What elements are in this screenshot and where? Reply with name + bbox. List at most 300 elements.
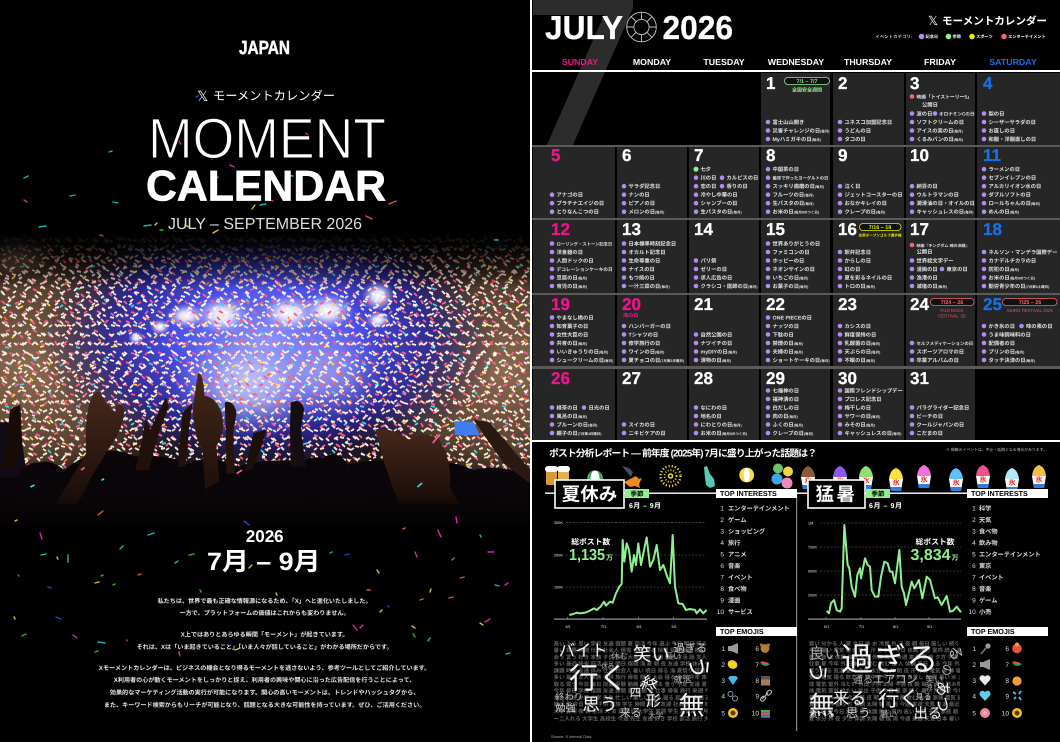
- day 9: おなかキレイの日: [844, 200, 887, 207]
- total posts: 万: [606, 554, 613, 562]
- report heading: ポスト分析レポート — 前年度 (2025年) 7月に盛り上がった話題は？: [549, 448, 817, 460]
- season tag: 季節: [630, 490, 644, 498]
- brand: X Moment Calendar: モーメントカレンダー: [213, 89, 335, 103]
- top emojis: 2: [721, 662, 725, 669]
- day 9: [833, 146, 904, 218]
- word cloud: 多い 最近 帰省 部活 今日 明日 宿題 海 夏 朝 夜 友達 学校 休み やばい 勉強 就活 時間: [554, 661, 758, 667]
- day 5: アナゴの日: [556, 192, 583, 199]
- day 20: ハンバーガーの日: [628, 323, 671, 330]
- day 30: みその日(毎月): [844, 422, 875, 428]
- day 4: 4: [983, 74, 993, 93]
- day 25: うま味調味料の日: [988, 332, 1031, 338]
- day 22: 夫婦の日(毎月): [772, 348, 803, 356]
- word cloud: バイト: [559, 642, 607, 660]
- day 30: プロレス記念日: [844, 396, 882, 403]
- day 7: [689, 146, 759, 218]
- day 21: 漬物の日(毎月): [700, 357, 731, 364]
- line chart: 6/1: [824, 625, 829, 629]
- line chart: 1M: [808, 521, 813, 525]
- day 7: 香りの日: [726, 183, 748, 190]
- day 25: プリンの日(毎月): [988, 348, 1024, 356]
- top interests: 4: [720, 540, 724, 547]
- legend: event categories: 季節: [952, 34, 961, 39]
- heat icons row: shaved ice cups: [801, 465, 1046, 491]
- line chart: 200K: [554, 553, 563, 557]
- word cloud: 出る: [914, 705, 942, 721]
- icon: goldfish: [622, 466, 642, 488]
- top interests: 天気: [979, 516, 991, 524]
- day 7: 七夕: [700, 166, 711, 173]
- season tag: [625, 489, 649, 498]
- day 30: キャッシュレスの日(毎月): [844, 430, 901, 437]
- line chart: 500K: [808, 569, 817, 573]
- panel: cover background: [0, 0, 530, 742]
- day 25: [977, 295, 1060, 366]
- day 19: 女性大臣の日: [556, 332, 588, 338]
- icon: hot face: [1012, 642, 1022, 653]
- line chart: 300K: [554, 521, 563, 525]
- event pill: Fuji Rock: [930, 298, 974, 318]
- heat icons row: shaved ice cups: 氷: [920, 476, 928, 484]
- day 15: ネオンサインの日: [772, 266, 815, 273]
- day 15: ホッピーの日: [772, 258, 804, 264]
- day 11: ラーメンの日: [988, 166, 1020, 173]
- day 7: 冷やし中華の日: [700, 192, 738, 199]
- day 23: 天ぷらの日(毎月): [844, 348, 880, 356]
- day 22: ONE PIECEの日: [772, 314, 812, 322]
- day 17: 減塩の日(毎月): [916, 283, 947, 290]
- word cloud: 毎日 汗 外 今年 今週 昼 夜 朝 風 雨 冷房 飲む 水 夏 家族 電気 寝る 室内 太陽 高い: [809, 695, 1005, 701]
- day 31: 31: [910, 369, 929, 388]
- word cloud: 夏 水分 外 夜 夕方 体調 太陽 朝 風 雨 今週 来週 天気 日本 暑い 続く 最近 毎日 今年: [809, 716, 1009, 722]
- scattered confetti: [14, 96, 510, 656]
- day 9: ジェットコースターの日: [844, 192, 903, 199]
- line chart: 7/1: [859, 625, 864, 629]
- day 16: 駅弁記念日: [844, 249, 871, 256]
- day 25: 味の素の日: [1026, 323, 1052, 330]
- gap: [530, 0, 532, 742]
- day 7: 恋の日: [700, 183, 716, 190]
- event pill: national safety week: [784, 78, 830, 94]
- brand: X Moment Calendar: 𝕏: [928, 13, 938, 28]
- day 14: クラシコ・医師の日(毎月): [700, 283, 757, 290]
- day 10: 納豆の日: [916, 183, 938, 190]
- icon: watermelon: [760, 661, 770, 666]
- day 12: 12: [551, 220, 570, 239]
- icon: links: [728, 692, 738, 701]
- day 22: ナッツの日: [772, 323, 799, 330]
- day 16: トロの日(毎月): [844, 283, 875, 290]
- word cloud: 思う: [846, 706, 870, 720]
- word cloud: 課題 時間 友達 休み 仕事 社会人 暑い 明日 帰る 海 夏祭り 読書 映画 観る 予定 旅行 夜: [554, 668, 762, 674]
- day 24: セルフメディケーションの日: [916, 341, 973, 346]
- top emojis: 7: [1005, 662, 1009, 669]
- day 11: 11: [983, 146, 1001, 165]
- intro text: [99, 597, 430, 709]
- day 14: [689, 220, 759, 293]
- word cloud: う: [806, 662, 829, 683]
- day 20: [617, 295, 687, 366]
- day 10: 潤滑油の日・オイルの日: [916, 200, 975, 207]
- word cloud: 食べる: [809, 709, 835, 719]
- day 10: ウルトラマンの日: [916, 192, 959, 199]
- day 29: ふくの日(毎月): [772, 422, 803, 428]
- day 1: 富士山山開き: [772, 119, 804, 126]
- day 27: スイカの日: [628, 422, 655, 428]
- day 27: [617, 369, 687, 440]
- icon: gem: [728, 676, 738, 685]
- word cloud: あつ: [934, 681, 951, 712]
- word cloud: 取る 買う 今日 毎日 授業 受験 動画 読む 観る 食う 予定 友達 夏休 大変 暑い 通る 今年: [554, 681, 762, 687]
- icon: yellow ball: [739, 468, 754, 482]
- top emojis: 10: [752, 710, 759, 718]
- panel: cover: [0, 40, 530, 708]
- day 5: プラチナエイジの日: [556, 200, 604, 207]
- month heading: JULY: [545, 9, 623, 46]
- day 11: めんの日(毎月): [988, 209, 1019, 216]
- day 26: 風呂の日(毎月): [556, 413, 587, 420]
- day 21: ナツイチの日: [700, 340, 732, 347]
- top interests: 10: [968, 609, 976, 616]
- day 13: [617, 220, 687, 293]
- icon: flower: [980, 708, 990, 718]
- word cloud: 過ぎる: [841, 642, 938, 678]
- top interests: 東京: [979, 562, 991, 570]
- day 5: とりなんこつの日: [556, 209, 599, 216]
- day 2: うどんの日: [844, 128, 871, 134]
- logo: JAPAN: JAPAN: [239, 38, 290, 59]
- day 16: [833, 220, 904, 293]
- day 22: 下駄の日: [772, 332, 794, 338]
- top emojis: 8: [1005, 678, 1009, 685]
- word cloud: 来る: [833, 689, 866, 708]
- day 5: [533, 146, 615, 218]
- word cloud: 思う: [582, 695, 618, 715]
- day 21: 21: [694, 295, 713, 314]
- day 22: ショートケーキの日(毎月): [772, 357, 830, 364]
- event pill: Muro Festival: MURO FESTIVAL 2026: [1007, 308, 1053, 313]
- day 25: タッチ決済の日(毎月): [988, 357, 1035, 364]
- weekday header: WEDNESDAY: [768, 57, 824, 67]
- day 19: いいきゅうりの日(毎月): [556, 348, 608, 356]
- day 9: 9: [838, 146, 847, 165]
- top interests: 7: [720, 574, 724, 582]
- day 12: ローリング・ストーン記念日: [556, 242, 612, 246]
- vertical divider: [796, 493, 797, 731]
- day 3: オロナミンCの日: [939, 112, 974, 116]
- day 17: 世界絵文字デー: [916, 258, 954, 264]
- day 17: 17: [910, 220, 929, 239]
- day 16: 夏を彩るネイルの日: [844, 274, 892, 282]
- legend: event categories: [876, 34, 1046, 39]
- day 12: 洋食器の日: [556, 249, 583, 256]
- day 25: 25: [983, 295, 1002, 314]
- day 14: パリ祭: [700, 258, 717, 264]
- day 14: 求人広告の日: [700, 274, 732, 282]
- day 25: 配偶者の日: [988, 340, 1015, 347]
- total posts: 3,834: [910, 547, 951, 564]
- day 13: オカルト記念日: [628, 249, 666, 256]
- intro text: 私たちは、世界で最も正確な情報源になるため、「X」へと進化いたしました。: [158, 597, 372, 605]
- day 3: くるみパンの日(毎月): [916, 136, 963, 143]
- panel: post analysis report: [532, 440, 1060, 739]
- event pill: The Open golf: 7/16 – 19: [869, 225, 891, 231]
- icon: beach ball: [588, 470, 602, 486]
- heat icons row: shaved ice cups: 氷: [1036, 476, 1042, 484]
- top interests: TOP INTERESTS: [720, 489, 777, 498]
- source: Source: X Internal Data: [551, 734, 592, 739]
- day 8: 菌床で作ったヨーグルトの日: [772, 176, 828, 181]
- top interests: 2: [720, 517, 724, 524]
- word cloud: 飲む 夜 人 体調 毎日 入る 外出 天気 今週 来週 風 雨 夕方 子供 室外 冷房 水 日差し: [809, 654, 1007, 660]
- word cloud: 暑い: [880, 709, 897, 719]
- word cloud: 会う 言う 好き 家族 子供 旅行 大会 先生 今週 来週 生活 話 友人 人 毎日 楽しみ 一緒 今: [554, 654, 763, 660]
- day 13: 一汁三菜の日(毎月): [628, 283, 670, 290]
- word cloud: 行く: [569, 662, 628, 695]
- day 27: 27: [622, 369, 641, 388]
- day 23: [833, 295, 904, 366]
- day 16: からしの日: [844, 258, 871, 264]
- day 2: 2: [838, 74, 847, 93]
- day 28: お米の日(毎月8のつく日): [700, 430, 747, 437]
- top interests: 1: [720, 506, 724, 512]
- day 23: 23: [838, 295, 857, 314]
- day 18: [977, 220, 1060, 293]
- day 2: [833, 73, 904, 145]
- top interests: 3: [972, 528, 976, 536]
- top interests: 科学: [979, 504, 991, 512]
- word cloud: 笑い: [925, 674, 943, 684]
- day 12: デコレーションケーキの日: [556, 266, 613, 272]
- day 13: 日本標準時刻記念日: [628, 240, 676, 248]
- day 9: 泣く日: [844, 183, 860, 190]
- day 22: 22: [766, 295, 785, 314]
- word cloud: 通る: [853, 674, 873, 686]
- column: summer vacation: [554, 480, 797, 722]
- word cloud: 気温 電気 寝る 飲む 汗 熱中症 今日 夕方 日差し 外 夏 暑い 水 太陽 高い 子供 家族: [809, 674, 1006, 680]
- top interests: 7: [972, 574, 976, 582]
- top emojis: [716, 627, 797, 718]
- top interests: 10: [717, 609, 724, 616]
- day 20: 修学旅行の日: [628, 340, 660, 347]
- day 26: [533, 369, 615, 440]
- weekday header: MONDAY: [633, 57, 671, 67]
- top emojis: 8: [755, 678, 759, 685]
- topic label: 猛暑: [815, 484, 858, 504]
- word cloud: 大学: [648, 711, 663, 720]
- legend: event categories: エンターテイメント: [1008, 34, 1046, 39]
- day 9: クレープの日(毎月): [844, 209, 885, 216]
- day 4: 和服・洋服直しの日: [988, 136, 1036, 143]
- heat icons row: shaved ice cups: 氷: [892, 479, 900, 487]
- day 29: [761, 369, 830, 440]
- day 4: [977, 73, 1060, 145]
- icon: microphone: [981, 643, 991, 654]
- word cloud: 無: [679, 692, 704, 720]
- day 1: [761, 73, 830, 145]
- weekday header: SATURDAY: [989, 57, 1037, 67]
- event pill: national safety week: 7/1 – 7/7: [797, 79, 817, 85]
- day 3: 映画「トイストーリー5」: [916, 94, 972, 100]
- brand: X Moment Calendar: モーメントカレンダー: [942, 14, 1047, 28]
- line chart: 9/1: [927, 625, 932, 629]
- line chart: 6/1: [566, 625, 571, 629]
- day 29: 福神漬の日: [772, 396, 799, 403]
- day 6: [617, 146, 687, 218]
- day 30: 国際フレンドシップデー: [844, 388, 903, 394]
- top interests: 食べ物: [728, 585, 747, 593]
- heat icons row: shaved ice cups: 氷: [804, 477, 812, 485]
- intro text: 一方で、プラットフォームの価値はこれからも変わりません。: [180, 609, 350, 617]
- total posts: 万: [952, 554, 958, 562]
- day 12: 豆腐の日(毎月): [556, 274, 587, 282]
- top interests: 8: [720, 586, 724, 593]
- word cloud: 涼しい: [925, 683, 948, 692]
- word cloud: 仕事 夏 今年 外 日本 体 飲む 飲む 夜 人 体調 毎日 入る 今年 外 夏 暑い 気温 高い: [809, 661, 1004, 667]
- word cloud: 今日 暑い 電気 寝る 飲む 汗 熱中症 今日 体調 水分 室内 続く 高い 冷たい 最近 毎年: [809, 647, 1010, 653]
- day 8: お米の日(毎月8のつく日): [772, 209, 819, 216]
- top interests: 漫画: [728, 596, 740, 604]
- top interests: 4: [972, 540, 976, 547]
- day 20: Tシャツの日: [628, 332, 658, 338]
- word cloud: 勉強: [555, 703, 576, 714]
- line chart: 750K: [808, 545, 817, 549]
- top interests: 9: [972, 598, 976, 604]
- word cloud: 就活: [674, 674, 691, 684]
- weekday header: FRIDAY: [924, 57, 956, 67]
- word cloud: 笑い: [633, 644, 670, 665]
- icon: sunflower: [1012, 708, 1022, 718]
- line chart: 7/1: [601, 625, 606, 629]
- legend: event categories: スポーツ: [976, 34, 993, 39]
- day 2: ユネスコ加盟記念日: [844, 119, 892, 126]
- legend: event categories: イベントカテゴリ:: [876, 34, 912, 39]
- day 19: 共育の日(毎月): [556, 340, 587, 347]
- event pill: Muro Festival: 7/25 – 26: [1019, 300, 1041, 306]
- day 1: Myハミガキの日(毎月): [772, 136, 821, 143]
- icon: megaphone: [728, 643, 738, 654]
- day 3: 公開日: [922, 102, 938, 108]
- day 30: [833, 369, 904, 440]
- day 7: 川の日: [700, 175, 716, 182]
- day 24: スポーツアロマの日: [916, 348, 964, 356]
- heat icons row: shaved ice cups: 氷: [836, 477, 844, 485]
- heat icons row: shaved ice cups: 氷: [952, 479, 960, 487]
- total posts: 総ポスト数: [571, 538, 610, 546]
- top emojis: 6: [755, 646, 759, 653]
- top emojis: 5: [972, 710, 976, 718]
- day 11: [977, 146, 1060, 218]
- day 3: 3: [910, 74, 919, 93]
- day 28: なにわの日: [700, 404, 727, 412]
- day 19: 知育菓子の日: [556, 323, 588, 330]
- day 11: ロールちゃんの日(毎月): [988, 200, 1040, 207]
- day 1: 1: [766, 74, 775, 93]
- day 15: 世界ありがとうの日: [772, 240, 820, 248]
- day 31: [906, 369, 975, 440]
- day 29: クレープの日(毎月): [772, 430, 813, 437]
- panel: calendar background: [532, 0, 1060, 742]
- top emojis: 2: [972, 662, 976, 669]
- day 21: 自然公園の日: [700, 332, 732, 338]
- day 31: ビーチの日: [916, 413, 943, 420]
- top emojis: 4: [721, 694, 725, 700]
- icon: books: [761, 710, 770, 718]
- top emojis: TOP EMOJIS: [971, 627, 1015, 636]
- word cloud: 終わり: [555, 692, 583, 702]
- heat icons row: shaved ice cups: 氷: [862, 477, 870, 485]
- day 24: [906, 295, 975, 366]
- day 26: 親子の日(7月第4日曜日): [556, 430, 601, 437]
- event pill: Fuji Rock: 7/24 – 26: [941, 300, 963, 306]
- day 15: ファミコンの日: [772, 249, 810, 256]
- word cloud: 友人 高校 中学 大学 先生 忙しい 楽しい 戻る 寝る 起きる 来週 通る 今年 夏 旅行 海 花火: [554, 695, 767, 701]
- top interests: 食べ物: [979, 528, 998, 536]
- top interests: 1: [972, 506, 976, 512]
- day 8: 生パスタの日(毎月): [772, 200, 814, 207]
- top emojis: 9: [1005, 694, 1009, 700]
- day 14: ゼリーの日: [700, 266, 727, 273]
- day 31: クールジャパンの日: [916, 422, 964, 428]
- top interests: ショッピング: [728, 528, 766, 536]
- day 18: お米の日(毎月8のつく日): [988, 274, 1035, 282]
- icon: sunflower: [728, 708, 738, 718]
- day 4: 梨の日: [988, 110, 1004, 118]
- heat icons row: shaved ice cups: 氷: [1008, 479, 1016, 487]
- day 13: 13: [622, 220, 641, 239]
- event pill: The Open golf: [859, 224, 902, 238]
- intro text: それは、Xは「いま起きていること」「いま人々が話していること」がわかる場所だからです。: [137, 643, 393, 651]
- brand: X Moment Calendar: 𝕏: [197, 89, 208, 105]
- word cloud: う: [685, 655, 712, 679]
- day 20: 海の日: [623, 312, 639, 319]
- day 26: 26: [551, 369, 570, 388]
- day 27: ニキビケアの日: [628, 430, 666, 437]
- top emojis: 10: [1002, 710, 1009, 718]
- word cloud: [809, 640, 962, 721]
- day 22: [761, 295, 830, 366]
- icon: ramune bottle: [704, 466, 715, 488]
- icon: beer mugs: [545, 466, 570, 485]
- intro text: Xモーメントカレンダーは、ビジネスの機会となり得るモーメントを逃さないよう、参考ツールとしてご紹介しています。: [99, 664, 430, 672]
- day 6: ナンの日: [628, 192, 650, 199]
- top interests: 5: [972, 552, 976, 558]
- weekday header: SUNDAY: [562, 57, 598, 67]
- top interests: 音楽: [979, 585, 992, 593]
- month heading: 2026: [662, 9, 733, 46]
- day 20: ワインの日(毎月): [628, 348, 664, 356]
- day 28: 28: [694, 369, 713, 388]
- day 18: カナデルチカラの日: [988, 258, 1036, 264]
- season tag: [866, 489, 890, 498]
- day 15: いちごの日(毎月): [772, 274, 808, 282]
- day 4: お直しの日: [988, 128, 1015, 134]
- day 17: 公開日: [916, 248, 932, 256]
- day 12: 育児の日(毎月): [556, 283, 587, 290]
- title: MOMENT: MOMENT: [148, 107, 386, 171]
- day 22: 禁煙の日(毎月): [772, 340, 803, 347]
- day 3: ソフトクリームの日: [916, 119, 964, 126]
- top interests: サービス: [728, 608, 753, 616]
- day 10: 10: [910, 146, 929, 165]
- icon: ruby gem: [627, 12, 656, 42]
- day 8: 8: [766, 146, 775, 165]
- day 23: 乳酸菌の日(毎月): [844, 340, 880, 347]
- word cloud: 良い: [809, 645, 840, 662]
- top interests: 8: [972, 586, 976, 593]
- day 30: サワーの日(毎月): [844, 413, 880, 420]
- day 2: タコの日: [844, 136, 866, 143]
